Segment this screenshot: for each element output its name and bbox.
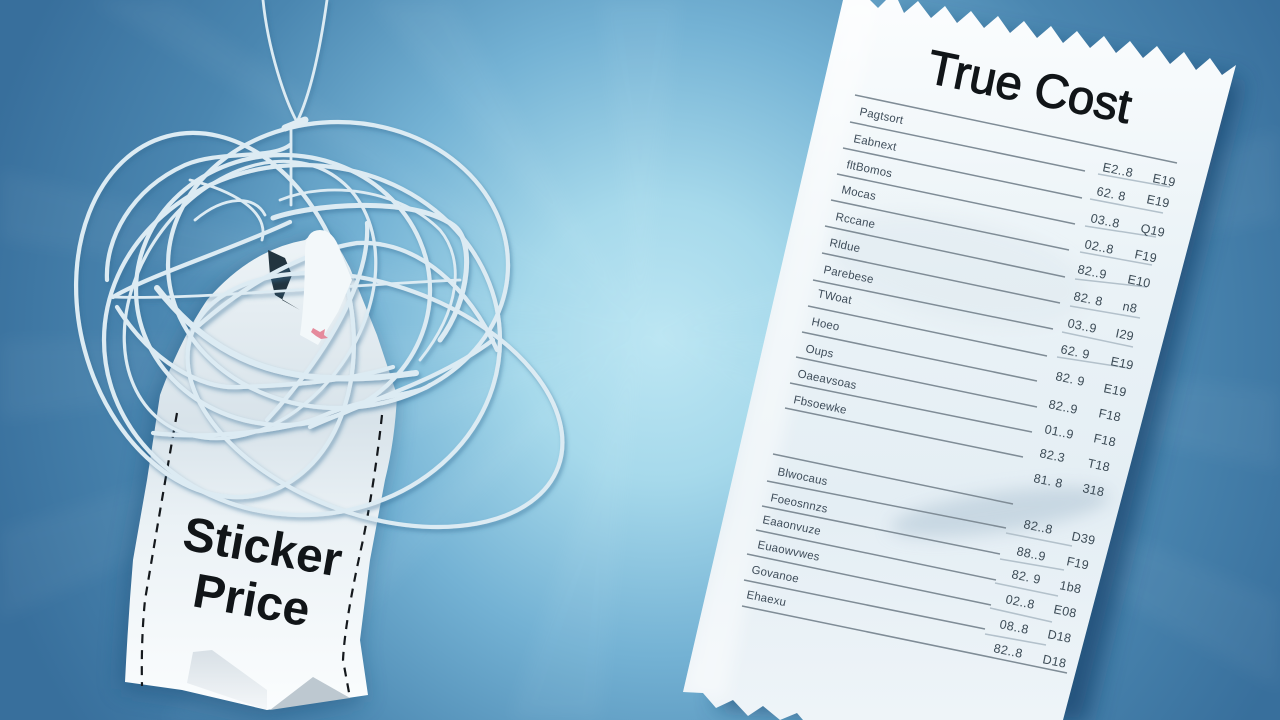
receipt line-item labels: TWoat bbox=[816, 288, 853, 307]
receipt line-item values: F18 bbox=[1092, 431, 1117, 449]
receipt line-item values: F19 bbox=[1065, 554, 1090, 572]
red mark bbox=[311, 328, 328, 339]
receipt line-item labels: Eabnext bbox=[852, 133, 898, 154]
receipt line-item values: 82. 8 bbox=[1072, 289, 1104, 309]
receipt line-item labels: Rccane bbox=[834, 211, 876, 231]
receipt line-item values: 82..8 bbox=[1022, 517, 1054, 537]
receipt: True Cost bbox=[683, 0, 1241, 720]
receipt line-item values: D18 bbox=[1041, 652, 1068, 671]
tag eyelet: knot, finger and red mark bbox=[285, 120, 352, 345]
receipt line-item values: 82. 9 bbox=[1010, 567, 1042, 587]
receipt line-item labels: Eaaonvuze bbox=[761, 514, 822, 538]
receipt line-item values: 08..8 bbox=[998, 617, 1030, 637]
receipt line-item labels bbox=[745, 106, 905, 609]
receipt line-item labels: Hoeo bbox=[810, 316, 841, 334]
receipt line-item labels: Oaeavsoas bbox=[796, 368, 858, 392]
receipt line-item labels: Fbsoewke bbox=[792, 394, 848, 417]
receipt line-item values: E19 bbox=[1102, 381, 1128, 400]
receipt line-item labels: Rldue bbox=[828, 237, 861, 255]
cord loops bbox=[168, 122, 508, 408]
tag label bbox=[179, 508, 346, 637]
receipt line-item values: 88..9 bbox=[1015, 544, 1047, 564]
receipt line-item values: E10 bbox=[1126, 272, 1152, 291]
price tag: Sticker Price bbox=[121, 232, 397, 716]
receipt line-item values: 02..8 bbox=[1083, 237, 1115, 257]
receipt line-item labels: Govanoe bbox=[750, 564, 800, 586]
receipt line-item values: D39 bbox=[1070, 529, 1097, 548]
receipt line-item values: 82. 9 bbox=[1054, 369, 1086, 389]
hanging strings bbox=[263, 0, 327, 205]
receipt line-item values: E08 bbox=[1052, 602, 1078, 621]
tag bottom fold bbox=[187, 650, 350, 710]
receipt line-item labels: Ehaexu bbox=[745, 589, 787, 609]
receipt line-item values: 82.3 bbox=[1038, 446, 1066, 465]
receipt line-item values bbox=[992, 160, 1177, 671]
receipt line-item values: 01..9 bbox=[1043, 422, 1075, 442]
receipt line-item values: 318 bbox=[1081, 481, 1106, 499]
receipt line-item values: F18 bbox=[1097, 406, 1122, 424]
receipt line-item values: 81. 8 bbox=[1032, 471, 1064, 491]
tag eyelet dark hole bbox=[268, 250, 300, 310]
receipt line-item labels: Blwocaus bbox=[776, 466, 829, 488]
receipt line-item labels: Foeosnnzs bbox=[769, 492, 829, 516]
receipt line-item values: T18 bbox=[1086, 456, 1111, 474]
receipt line-item values: 62. 9 bbox=[1059, 342, 1091, 362]
tangled white cord bbox=[37, 0, 598, 575]
receipt line-item values: 82..9 bbox=[1076, 262, 1108, 282]
receipt line-item values: D18 bbox=[1046, 627, 1073, 646]
receipt line-item values: 03..9 bbox=[1066, 316, 1098, 336]
tag label: Price bbox=[189, 565, 314, 637]
receipt line-item labels: Euaowvwes bbox=[756, 539, 821, 564]
receipt line-item labels: Pagtsort bbox=[858, 106, 905, 127]
receipt heading: True Cost bbox=[923, 41, 1136, 134]
tag stitching bbox=[142, 413, 382, 698]
receipt rules bbox=[742, 95, 1177, 673]
receipt line-item values: 03..8 bbox=[1089, 211, 1121, 231]
receipt line-item values: E2..8 bbox=[1101, 160, 1134, 180]
receipt line-item labels: Oups bbox=[804, 343, 835, 361]
receipt line-item values: n8 bbox=[1121, 299, 1138, 316]
receipt line-item labels: Mocas bbox=[840, 184, 877, 203]
receipt line-item labels: fltBomos bbox=[845, 159, 893, 180]
receipt line-item values: E19 bbox=[1109, 354, 1135, 373]
receipt line-item values: E19 bbox=[1151, 171, 1177, 190]
receipt line-item values: 82..8 bbox=[992, 641, 1024, 661]
receipt line-item values: E19 bbox=[1145, 192, 1171, 211]
receipt line-item values: 02..8 bbox=[1004, 592, 1036, 612]
receipt line-item values: 1b8 bbox=[1058, 578, 1083, 596]
receipt line-item values: I29 bbox=[1114, 326, 1135, 344]
receipt line-item labels: Parebese bbox=[822, 264, 875, 286]
receipt line-item values: 82..9 bbox=[1047, 397, 1079, 417]
receipt line-item values: F19 bbox=[1133, 247, 1158, 265]
receipt line-item values: Q19 bbox=[1139, 221, 1166, 240]
receipt line-item values: 62. 8 bbox=[1095, 184, 1127, 204]
tag label: Sticker bbox=[179, 508, 346, 588]
